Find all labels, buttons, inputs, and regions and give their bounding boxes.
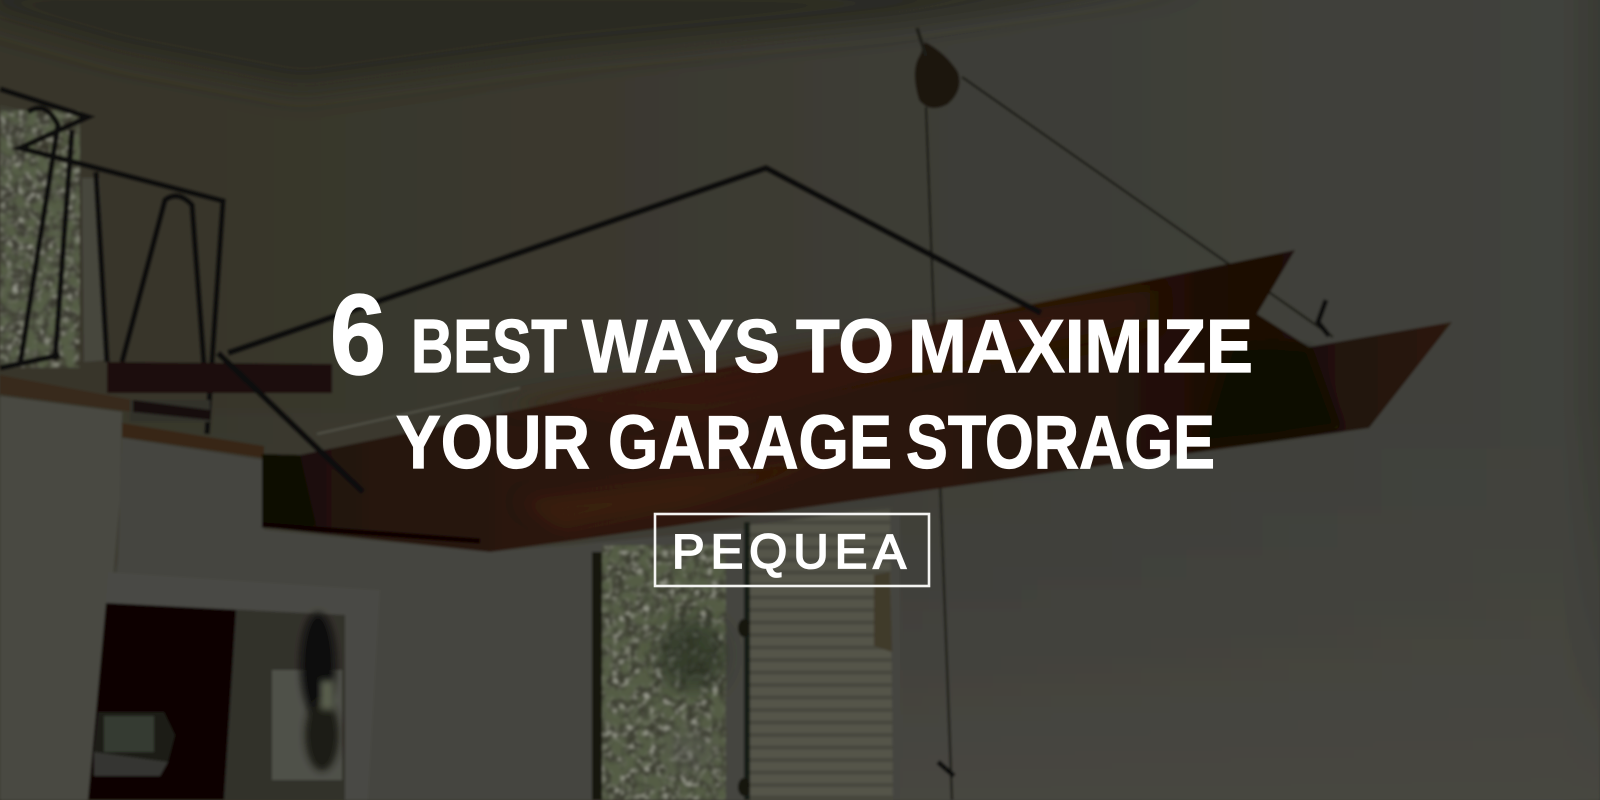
title line 1: WAYS: [582, 304, 780, 388]
thin frame lines: [317, 388, 520, 434]
left wood trims: [0, 362, 332, 458]
title line 1: TO: [796, 304, 894, 388]
lower wall lightening: [0, 400, 1600, 800]
pulley: [915, 28, 960, 108]
ceiling: [0, 0, 1200, 90]
title line 1: BEST: [411, 304, 567, 388]
title line 2: [396, 400, 1215, 484]
numeral 6: 6: [330, 272, 386, 399]
logo text: PEQUEA: [672, 526, 912, 579]
title line 2: GARAGE: [608, 400, 892, 484]
title line 2: STORAGE: [906, 400, 1215, 484]
logo: PEQUEA: [655, 514, 929, 586]
rope clip: [1318, 300, 1329, 336]
title: [330, 272, 1253, 484]
title line 1: [411, 304, 1253, 388]
rope knot: [938, 762, 954, 776]
title line 1: MAXIMIZE: [908, 304, 1253, 388]
doorway: [88, 572, 380, 800]
left railing and plant: [0, 89, 223, 434]
ropes: [926, 77, 1333, 800]
window opening with foliage: [592, 545, 726, 800]
logo box: [655, 514, 929, 586]
black frame rods: [218, 168, 1041, 492]
hanging wood platform: [262, 250, 1452, 552]
lower left wall column: [0, 396, 122, 800]
title line 2: YOUR: [396, 400, 590, 484]
window shutter: [738, 508, 893, 800]
